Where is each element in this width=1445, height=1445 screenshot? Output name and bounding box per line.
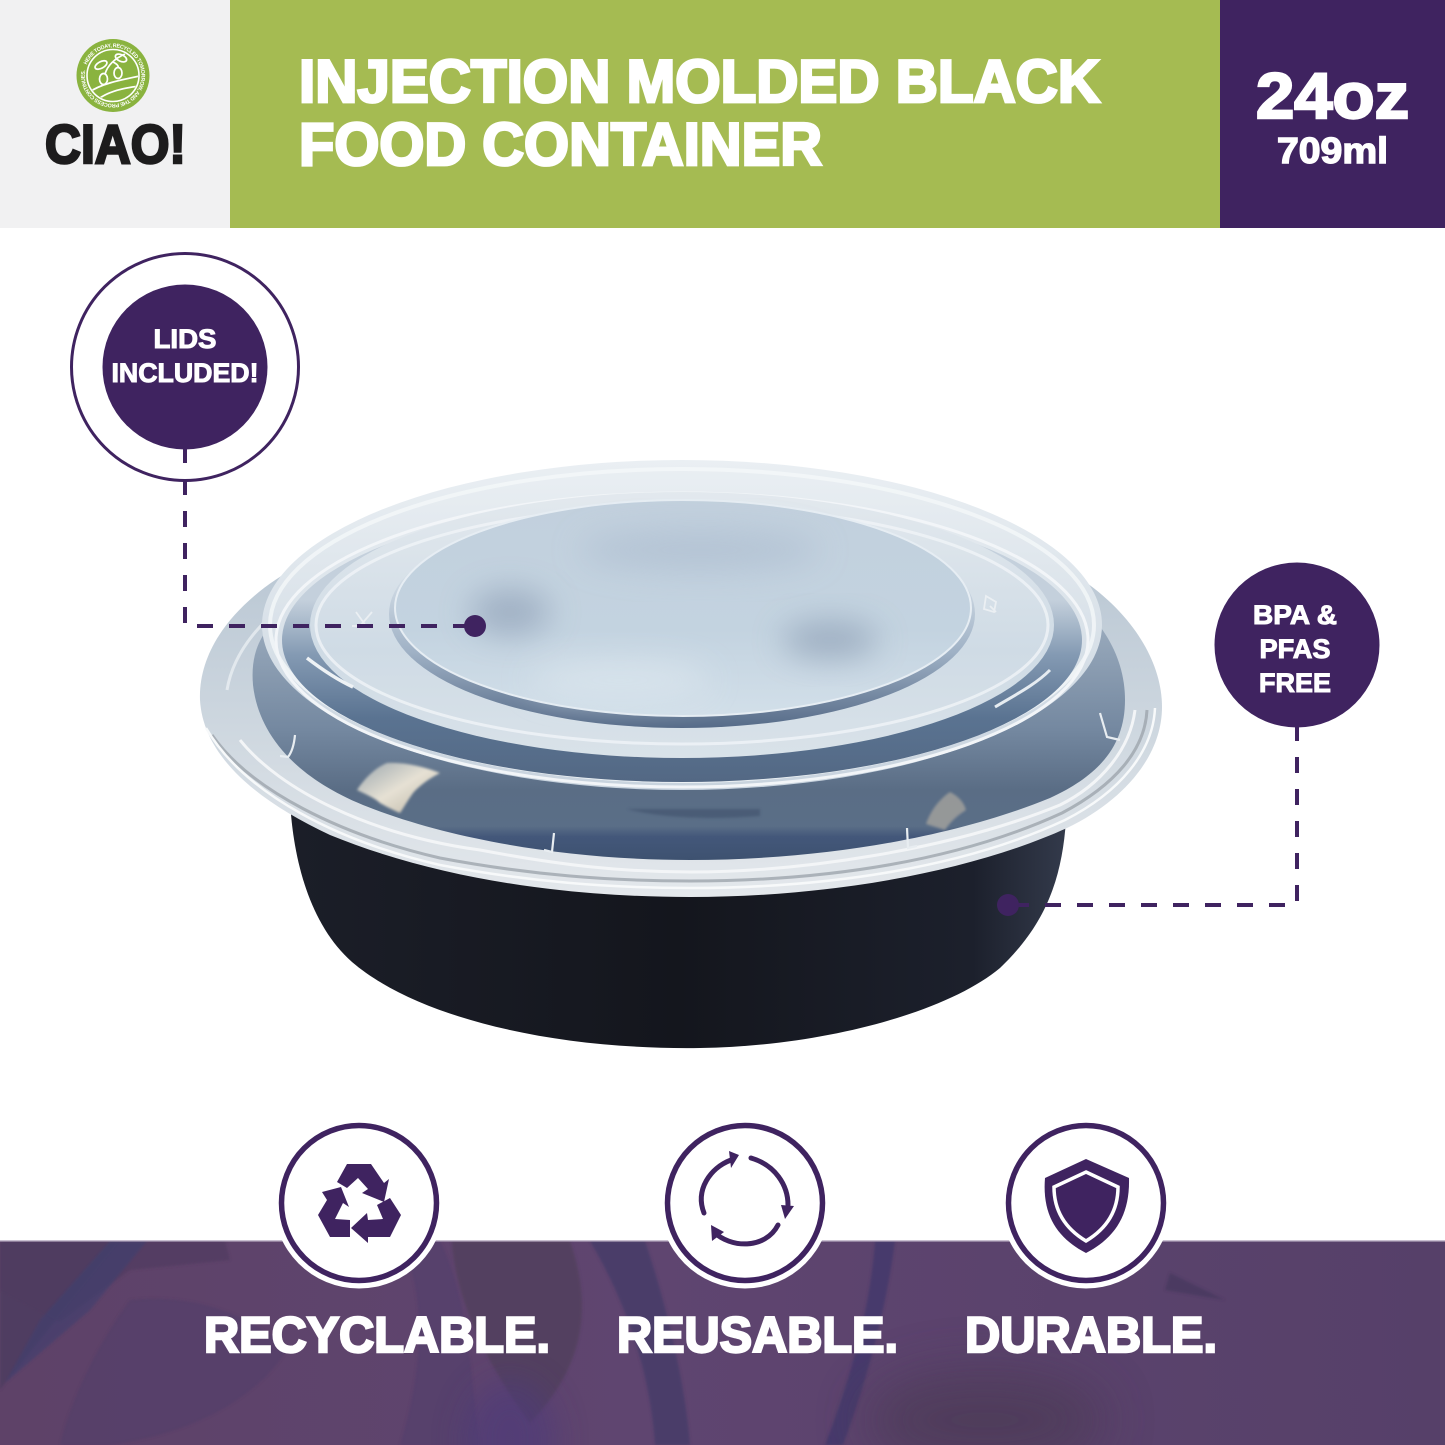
logo badge: HERE TODAY, RECYCLED TOMORROW, AND THE PROCESS CONTINUES. [80,44,146,108]
callout text [1253,600,1337,698]
tan reflection left [357,763,440,813]
callout dot [464,615,486,637]
header: title panel [230,0,1220,228]
callout text: BPA & [1253,600,1337,630]
lid dome [262,460,1102,790]
callout: lids included [72,254,486,637]
icon badge [1000,1118,1172,1288]
reflection streak [627,809,760,818]
tan reflection right [926,792,966,830]
size in millilitres: 709ml [1277,130,1388,171]
callout text: INCLUDED! [112,358,258,388]
icon: recycle arrows [318,1164,401,1243]
view through lid wall [253,600,1125,860]
callout ring [72,254,298,480]
title [299,48,1100,178]
callout badge [102,284,268,450]
logo wordmark: CIAO! [45,113,186,175]
container base [290,800,1066,1048]
feature: reusable [617,1118,898,1363]
lid rim [200,565,1162,897]
callout text: FREE [1259,668,1331,698]
feature: recyclable [204,1118,550,1363]
icon: shield [1045,1159,1129,1253]
callout text: LIDS [154,324,216,354]
icon: circular arrows [701,1151,794,1244]
callout leader line [185,447,475,626]
product photo: food container [200,460,1162,1048]
label: REUSABLE. [617,1307,898,1363]
size in ounces: 24oz [1256,60,1409,132]
lid clips [280,713,1120,852]
feature: durable [965,1118,1217,1363]
bottom band with leaf background [0,1241,1445,1445]
label: RECYCLABLE. [204,1307,550,1363]
icon badge [274,1118,444,1288]
callout text: PFAS [1260,634,1330,664]
icon badge [660,1118,830,1288]
callout text [112,324,258,388]
header: logo panel [0,0,230,228]
label: DURABLE. [965,1307,1217,1363]
title: INJECTION MOLDED BLACK [299,48,1100,115]
callout dot [997,894,1019,916]
callout leader line [1008,725,1297,905]
callout badge [1214,562,1380,728]
header: size panel [1220,0,1445,228]
recycling marks on lid [352,596,996,626]
callout: BPA and PFAS free [997,562,1380,916]
lid centre panel [389,500,975,728]
title: FOOD CONTAINER [299,111,822,178]
